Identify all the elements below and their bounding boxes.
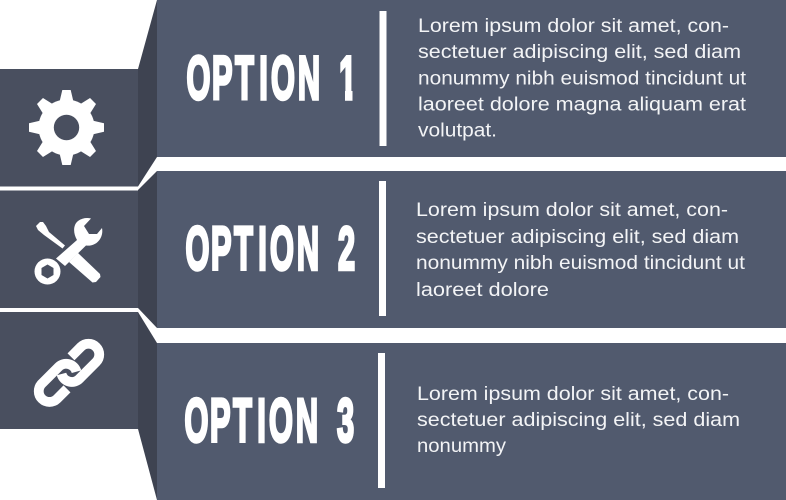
text block 2: Lorem ipsum dolor sit amet, con- [416, 199, 728, 221]
text block 1: sectetuer adipiscing elit, sed diam [418, 41, 741, 63]
text block 1: nonummy nibh euismod tincidunt ut [418, 68, 747, 90]
text block 3 [417, 383, 740, 457]
panel: option 1 [0, 0, 786, 186]
text block 2: nonummy nibh euismod tincidunt ut [416, 252, 746, 274]
text block 1: Lorem ipsum dolor sit amet, con- [418, 15, 729, 37]
heading: option 1: OPTION 1 [186, 45, 356, 113]
divider bar 1 [380, 11, 386, 146]
text block 1 [418, 15, 747, 142]
heading: option 2: OPTION 2 [186, 215, 355, 283]
text block 3: Lorem ipsum dolor sit amet, con- [417, 383, 729, 405]
heading: option 3: OPTION 3 [184, 387, 354, 455]
text block 1: laoreet dolore magna aliquam erat [418, 94, 747, 116]
icon: gear [29, 90, 104, 165]
divider bar 2 [379, 181, 386, 316]
panel: option 3 [0, 312, 786, 500]
icon: chain link [39, 344, 99, 402]
panel: option 2 [0, 171, 786, 328]
text block 3: sectetuer adipiscing elit, sed diam [417, 409, 740, 431]
icon: wrench and screwdriver [34, 218, 102, 284]
text block 2 [416, 199, 746, 301]
text block 2: laoreet dolore [416, 279, 549, 301]
divider bar 3 [378, 353, 385, 488]
text block 2: sectetuer adipiscing elit, sed diam [416, 226, 739, 248]
text block 3: nonummy [417, 435, 506, 457]
text block 1: volutpat. [418, 120, 497, 142]
